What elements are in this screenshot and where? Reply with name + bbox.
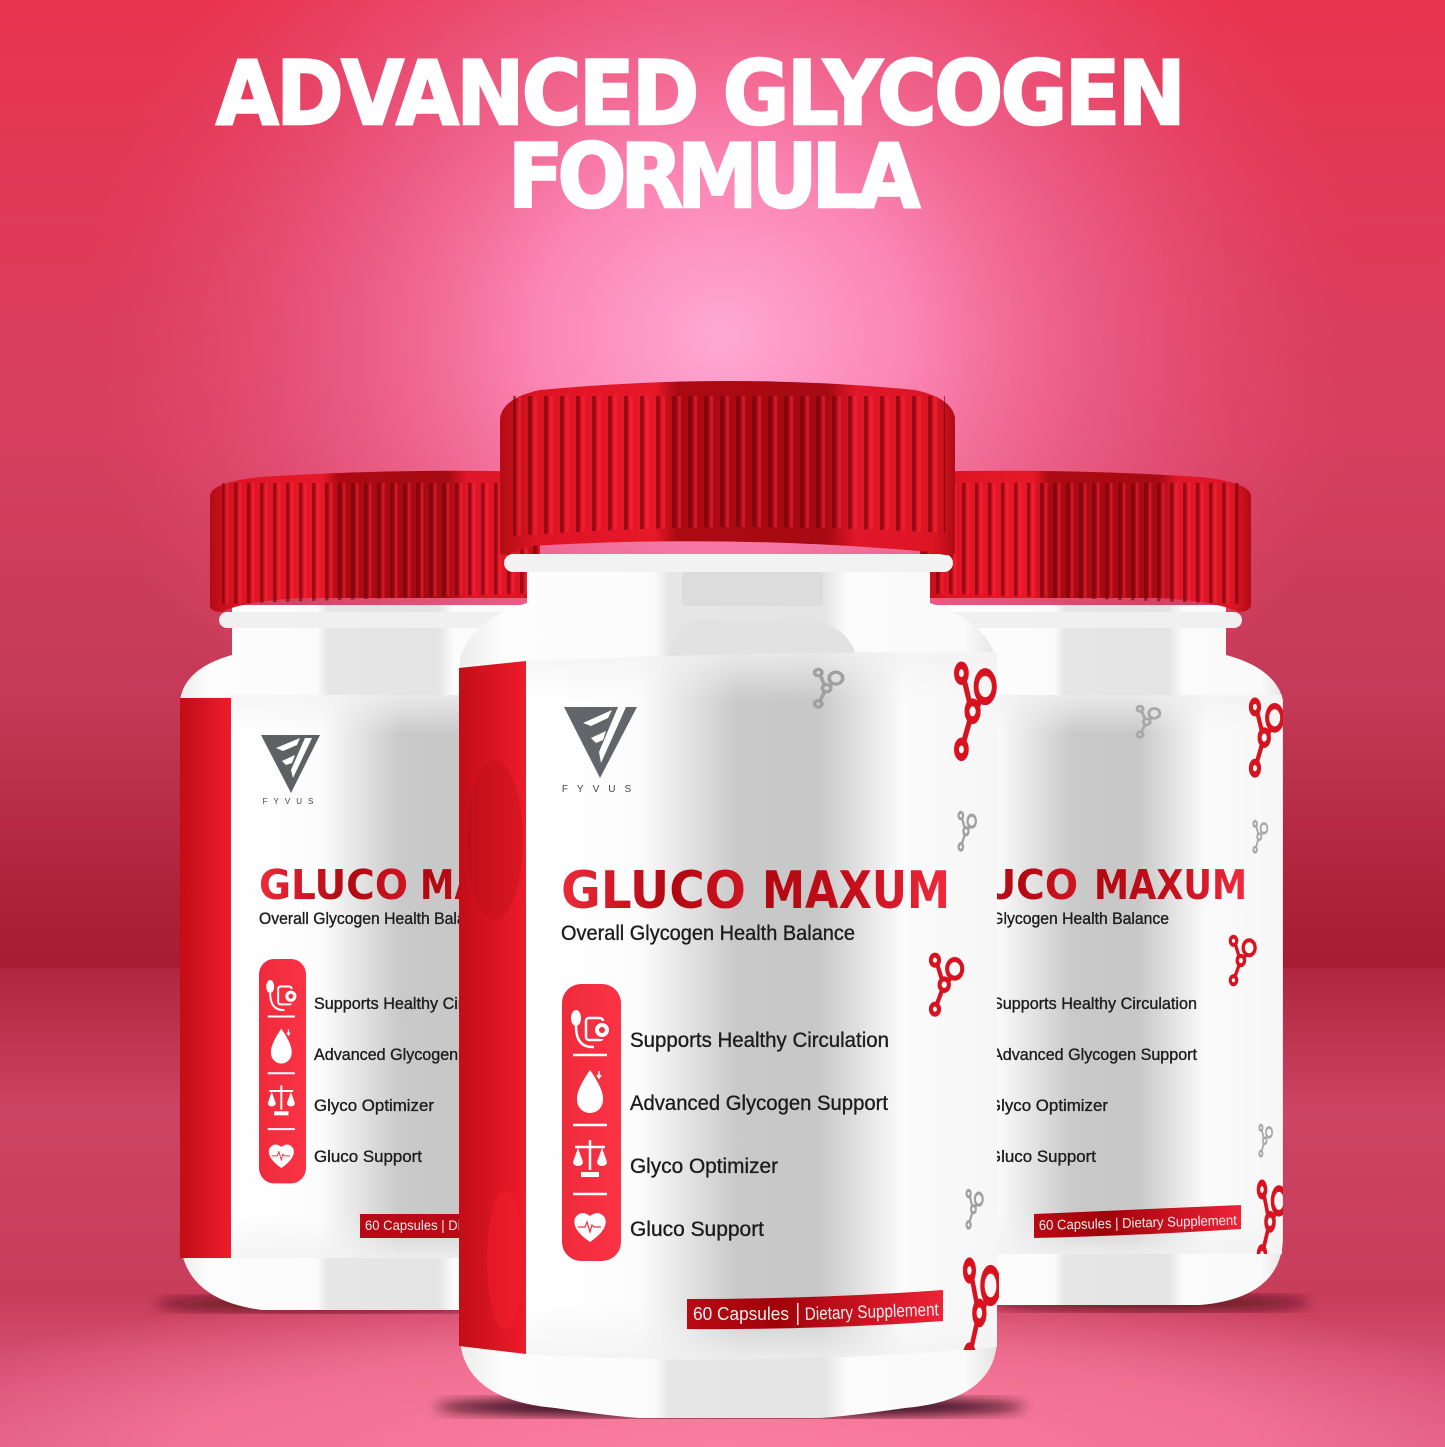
right bottle label background — [903, 695, 1282, 1254]
bottle shadows — [155, 1295, 1310, 1417]
center bottle logo: FYVUS — [562, 784, 640, 795]
center bottle product name: MAXUM — [762, 861, 950, 921]
left bottle icon column — [259, 959, 306, 1183]
left bottle red strip — [180, 698, 231, 1258]
left bottle product name: GLUCO — [259, 861, 408, 909]
left bottle cap — [210, 471, 540, 612]
center bottle icon column — [562, 984, 621, 1261]
left bottle body — [180, 605, 560, 1310]
title — [216, 43, 1186, 228]
center bottle product name — [561, 861, 950, 921]
left bottle — [180, 471, 610, 1310]
left bottle product name: MAXUM — [420, 861, 570, 909]
center bottle benefits — [630, 1029, 889, 1241]
center bottle shoulder shade — [668, 620, 857, 660]
right bottle benefits — [988, 994, 1197, 1166]
left bottle product name — [259, 861, 570, 909]
center bottle product name: GLUCO — [561, 861, 746, 921]
center bottle capsule badge — [687, 1290, 943, 1329]
title: ADVANCED GLYCOGEN — [216, 43, 1186, 145]
right bottle grey molecules — [1137, 706, 1272, 1156]
right bottle benefits: Glyco Optimizer — [988, 1096, 1108, 1115]
left bottle logo: FYVUS — [263, 797, 319, 806]
left bottle tagline: Overall Glycogen Health Balance — [259, 909, 491, 928]
left bottle neck lip — [219, 612, 549, 628]
right bottle cap — [920, 471, 1251, 612]
center bottle neck lip — [504, 554, 953, 572]
right bottle body — [925, 605, 1283, 1305]
center bottle neck shade — [682, 572, 823, 606]
left bottle label background — [230, 695, 610, 1258]
center bottle capsule badge: Dietary Supplement — [804, 1299, 939, 1324]
center bottle benefits: Supports Healthy Circulation — [630, 1029, 889, 1052]
center bottle red strip — [459, 661, 526, 1354]
center bottle tagline: Overall Glycogen Health Balance — [561, 922, 855, 945]
right bottle benefits: Advanced Glycogen Support — [992, 1045, 1197, 1064]
right bottle capsule badge — [1034, 1205, 1241, 1238]
left bottle benefits: Gluco Support — [314, 1147, 422, 1166]
left bottle capsule badge: 60 Capsules | Dietary Supplement — [365, 1217, 563, 1233]
left bottle benefits: Glyco Optimizer — [314, 1096, 434, 1115]
center bottle capsule badge: 60 Capsules — [693, 1304, 789, 1324]
center bottle label background — [526, 652, 997, 1360]
center bottle logo — [562, 707, 640, 795]
center bottle cap — [500, 381, 955, 555]
left bottle benefits: Advanced Glycogen Support — [314, 1045, 519, 1064]
left bottle logo — [261, 735, 320, 806]
right bottle benefits: Supports Healthy Circulation — [992, 994, 1197, 1013]
center bottle red molecules — [931, 665, 999, 1364]
right bottle red molecules — [1230, 701, 1286, 1261]
right bottle product name: GLUCO — [929, 861, 1078, 909]
left bottle benefits — [314, 994, 519, 1166]
center bottle grey molecules — [815, 669, 983, 1228]
left bottle capsule badge — [360, 1214, 567, 1238]
center bottle benefits: Gluco Support — [630, 1218, 764, 1241]
center bottle benefits: Glyco Optimizer — [630, 1155, 778, 1178]
background: stage floor — [0, 968, 1445, 1447]
right bottle neck lip — [925, 612, 1242, 628]
right bottle tagline: Overall Glycogen Health Balance — [937, 909, 1169, 928]
background: pink stage wall — [0, 0, 1445, 970]
center bottle neck and shoulder — [460, 560, 997, 1418]
right bottle product name — [929, 861, 1247, 909]
center bottle — [459, 381, 999, 1418]
right bottle capsule badge: 60 Capsules | Dietary Supplement — [1039, 1212, 1237, 1233]
left bottle benefits: Supports Healthy Circulation — [314, 994, 519, 1013]
title: FORMULA — [508, 126, 921, 228]
right bottle benefits: Gluco Support — [988, 1147, 1096, 1166]
right bottle product name: MAXUM — [1094, 861, 1247, 909]
center bottle benefits: Advanced Glycogen Support — [630, 1092, 888, 1115]
right bottle label seam — [995, 726, 996, 1250]
right bottle — [903, 471, 1286, 1305]
